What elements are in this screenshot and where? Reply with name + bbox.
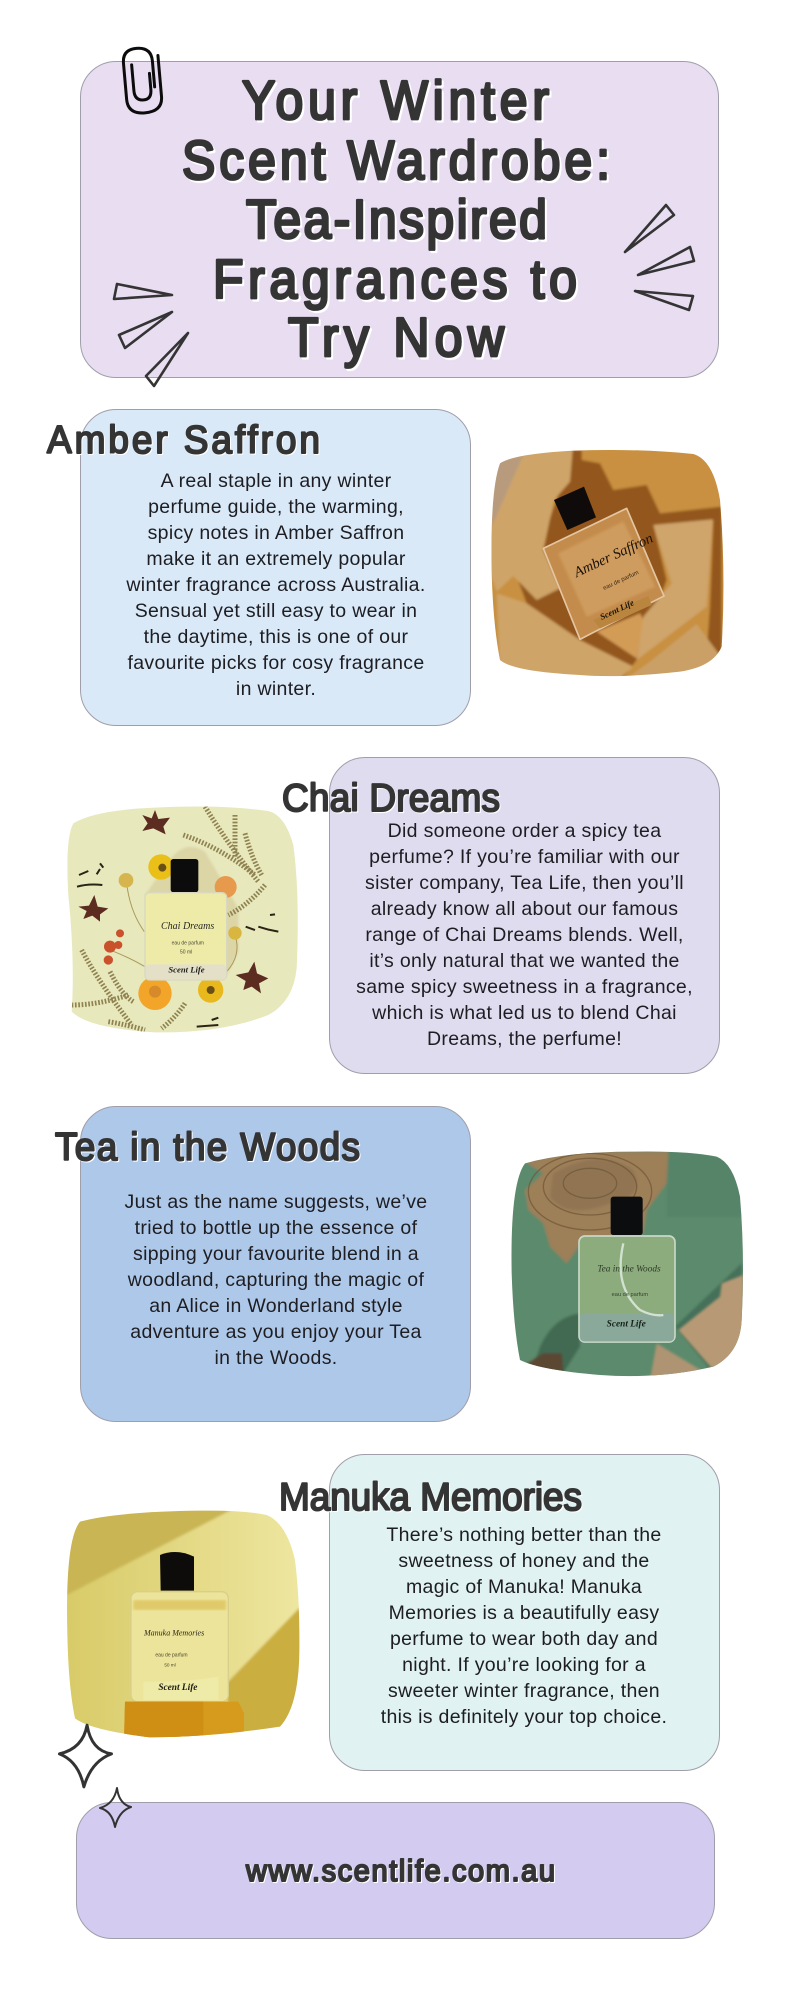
heading: Tea in the Woods: Tea in the Woods xyxy=(55,1126,360,1169)
heading: Chai Dreams: Chai Dreams xyxy=(282,777,500,820)
bottle xyxy=(579,1197,675,1342)
icon: large sparkle xyxy=(58,1724,113,1788)
text: Manuka Memories description: There’s nothing better than the xyxy=(386,1524,662,1546)
bottle: Scent Life xyxy=(158,1683,197,1693)
icon: left burst lines xyxy=(112,282,190,388)
amber block xyxy=(124,1702,244,1740)
icon: right burst lines xyxy=(624,204,696,312)
text: Chai Dreams description: already know all about our famous xyxy=(371,898,678,920)
text: Chai Dreams description: range of Chai Dreams blends. Well, xyxy=(365,924,684,946)
panel: title background xyxy=(80,61,719,378)
text: Amber Saffron description: perfume guide, the warming, xyxy=(148,496,404,518)
bottle: 50 ml xyxy=(164,1663,176,1668)
text: Chai Dreams description: same spicy sweetness in a fragrance, xyxy=(356,976,693,998)
text: Tea in the Woods description: woodland, capturing the magic of xyxy=(128,1269,424,1291)
text: Manuka Memories description: Memories is a beautifully easy xyxy=(389,1602,659,1624)
title: Tea-Inspired xyxy=(246,189,547,251)
panel: Amber Saffron xyxy=(80,409,471,726)
icon: paperclip xyxy=(122,46,164,114)
text: Chai Dreams description: Did someone order a spicy tea xyxy=(388,820,661,842)
text: Tea in the Woods description xyxy=(124,1191,427,1369)
text: Chai Dreams description: perfume? If you’re familiar with our xyxy=(369,846,680,868)
panel: Chai Dreams xyxy=(329,757,720,1074)
heading: website address: www.scentlife.com.au xyxy=(245,1854,555,1888)
title xyxy=(182,70,610,372)
text: Tea in the Woods description: an Alice in Wonderland style xyxy=(149,1295,403,1317)
text: Chai Dreams description xyxy=(356,820,693,1050)
bottle: Chai Dreams xyxy=(161,921,214,932)
bottle xyxy=(131,1552,228,1702)
image: Chai Dreams bottle xyxy=(68,806,298,1032)
text: Manuka Memories description: this is definitely your top choice. xyxy=(381,1706,667,1728)
bottle: Tea in the Woods xyxy=(597,1265,661,1275)
image: Manuka Memories bottle xyxy=(67,1510,300,1738)
bottle: Amber Saffron xyxy=(571,530,656,581)
text: Chai Dreams description: it’s only natural that we wanted the xyxy=(369,950,680,972)
image: Amber Saffron bottle xyxy=(492,450,724,676)
text: Manuka Memories description: perfume to wear both day and xyxy=(390,1628,658,1650)
text: Chai Dreams description: sister company, Tea Life, then you’ll xyxy=(365,872,684,894)
bottle: Scent Life xyxy=(607,1320,646,1330)
text: Chai Dreams description: Dreams, the perfume! xyxy=(427,1028,622,1050)
text: Tea in the Woods description: adventure as you enjoy your Tea xyxy=(130,1321,422,1343)
text: Manuka Memories description: sweetness of honey and the xyxy=(398,1550,650,1572)
text: Tea in the Woods description: in the Woods. xyxy=(214,1347,338,1369)
text: Manuka Memories description xyxy=(381,1524,667,1728)
bottle xyxy=(543,487,664,639)
bottle: Manuka Memories xyxy=(143,1629,204,1638)
text: Amber Saffron description xyxy=(126,470,426,700)
title: Your Winter xyxy=(242,70,549,132)
text: Amber Saffron description: winter fragrance across Australia. xyxy=(126,574,426,596)
image: Tea in the Woods bottle xyxy=(512,1152,743,1376)
title: Fragrances to xyxy=(213,249,577,311)
heading: Manuka Memories: Manuka Memories xyxy=(279,1476,582,1519)
icon: small sparkle xyxy=(99,1787,132,1828)
text: Tea in the Woods description: sipping your favourite blend in a xyxy=(133,1243,419,1265)
bottle: 50 ml xyxy=(180,949,192,955)
bottle: eau de parfum xyxy=(602,570,640,592)
bottle: eau de parfum xyxy=(612,1292,648,1298)
text: Chai Dreams description: which is what led us to blend Chai xyxy=(372,1002,677,1024)
text: Amber Saffron description: A real staple in any winter xyxy=(161,470,391,492)
text: Tea in the Woods description: tried to bottle up the essence of xyxy=(135,1217,417,1239)
title: Try Now xyxy=(288,307,505,369)
bottle xyxy=(145,859,227,980)
text: Manuka Memories description: magic of Manuka! Manuka xyxy=(406,1576,642,1598)
text: Amber Saffron description: Sensual yet still easy to wear in xyxy=(135,600,417,622)
bottle: Scent Life xyxy=(598,597,636,622)
text: Amber Saffron description: spicy notes in Amber Saffron xyxy=(148,522,404,544)
text: Amber Saffron description: in winter. xyxy=(236,678,316,700)
panel: Manuka Memories xyxy=(329,1454,720,1771)
text: Amber Saffron description: make it an extremely popular xyxy=(146,548,406,570)
text: Tea in the Woods description: Just as the name suggests, we’ve xyxy=(125,1191,427,1213)
heading: Amber Saffron: Amber Saffron xyxy=(47,419,320,462)
panel: website footer xyxy=(76,1802,715,1939)
text: Manuka Memories description: night. If you’re looking for a xyxy=(402,1654,646,1676)
text: Amber Saffron description: favourite picks for cosy fragrance xyxy=(127,652,424,674)
title: Scent Wardrobe: xyxy=(182,130,610,192)
bottle: eau de parfum xyxy=(172,941,204,947)
bottle: Scent Life xyxy=(168,964,205,974)
panel: Tea in the Woods xyxy=(80,1106,471,1422)
text: Amber Saffron description: the daytime, this is one of our xyxy=(144,626,408,648)
text: Manuka Memories description: sweeter winter fragrance, then xyxy=(388,1680,660,1702)
bottle: eau de parfum xyxy=(155,1653,188,1659)
